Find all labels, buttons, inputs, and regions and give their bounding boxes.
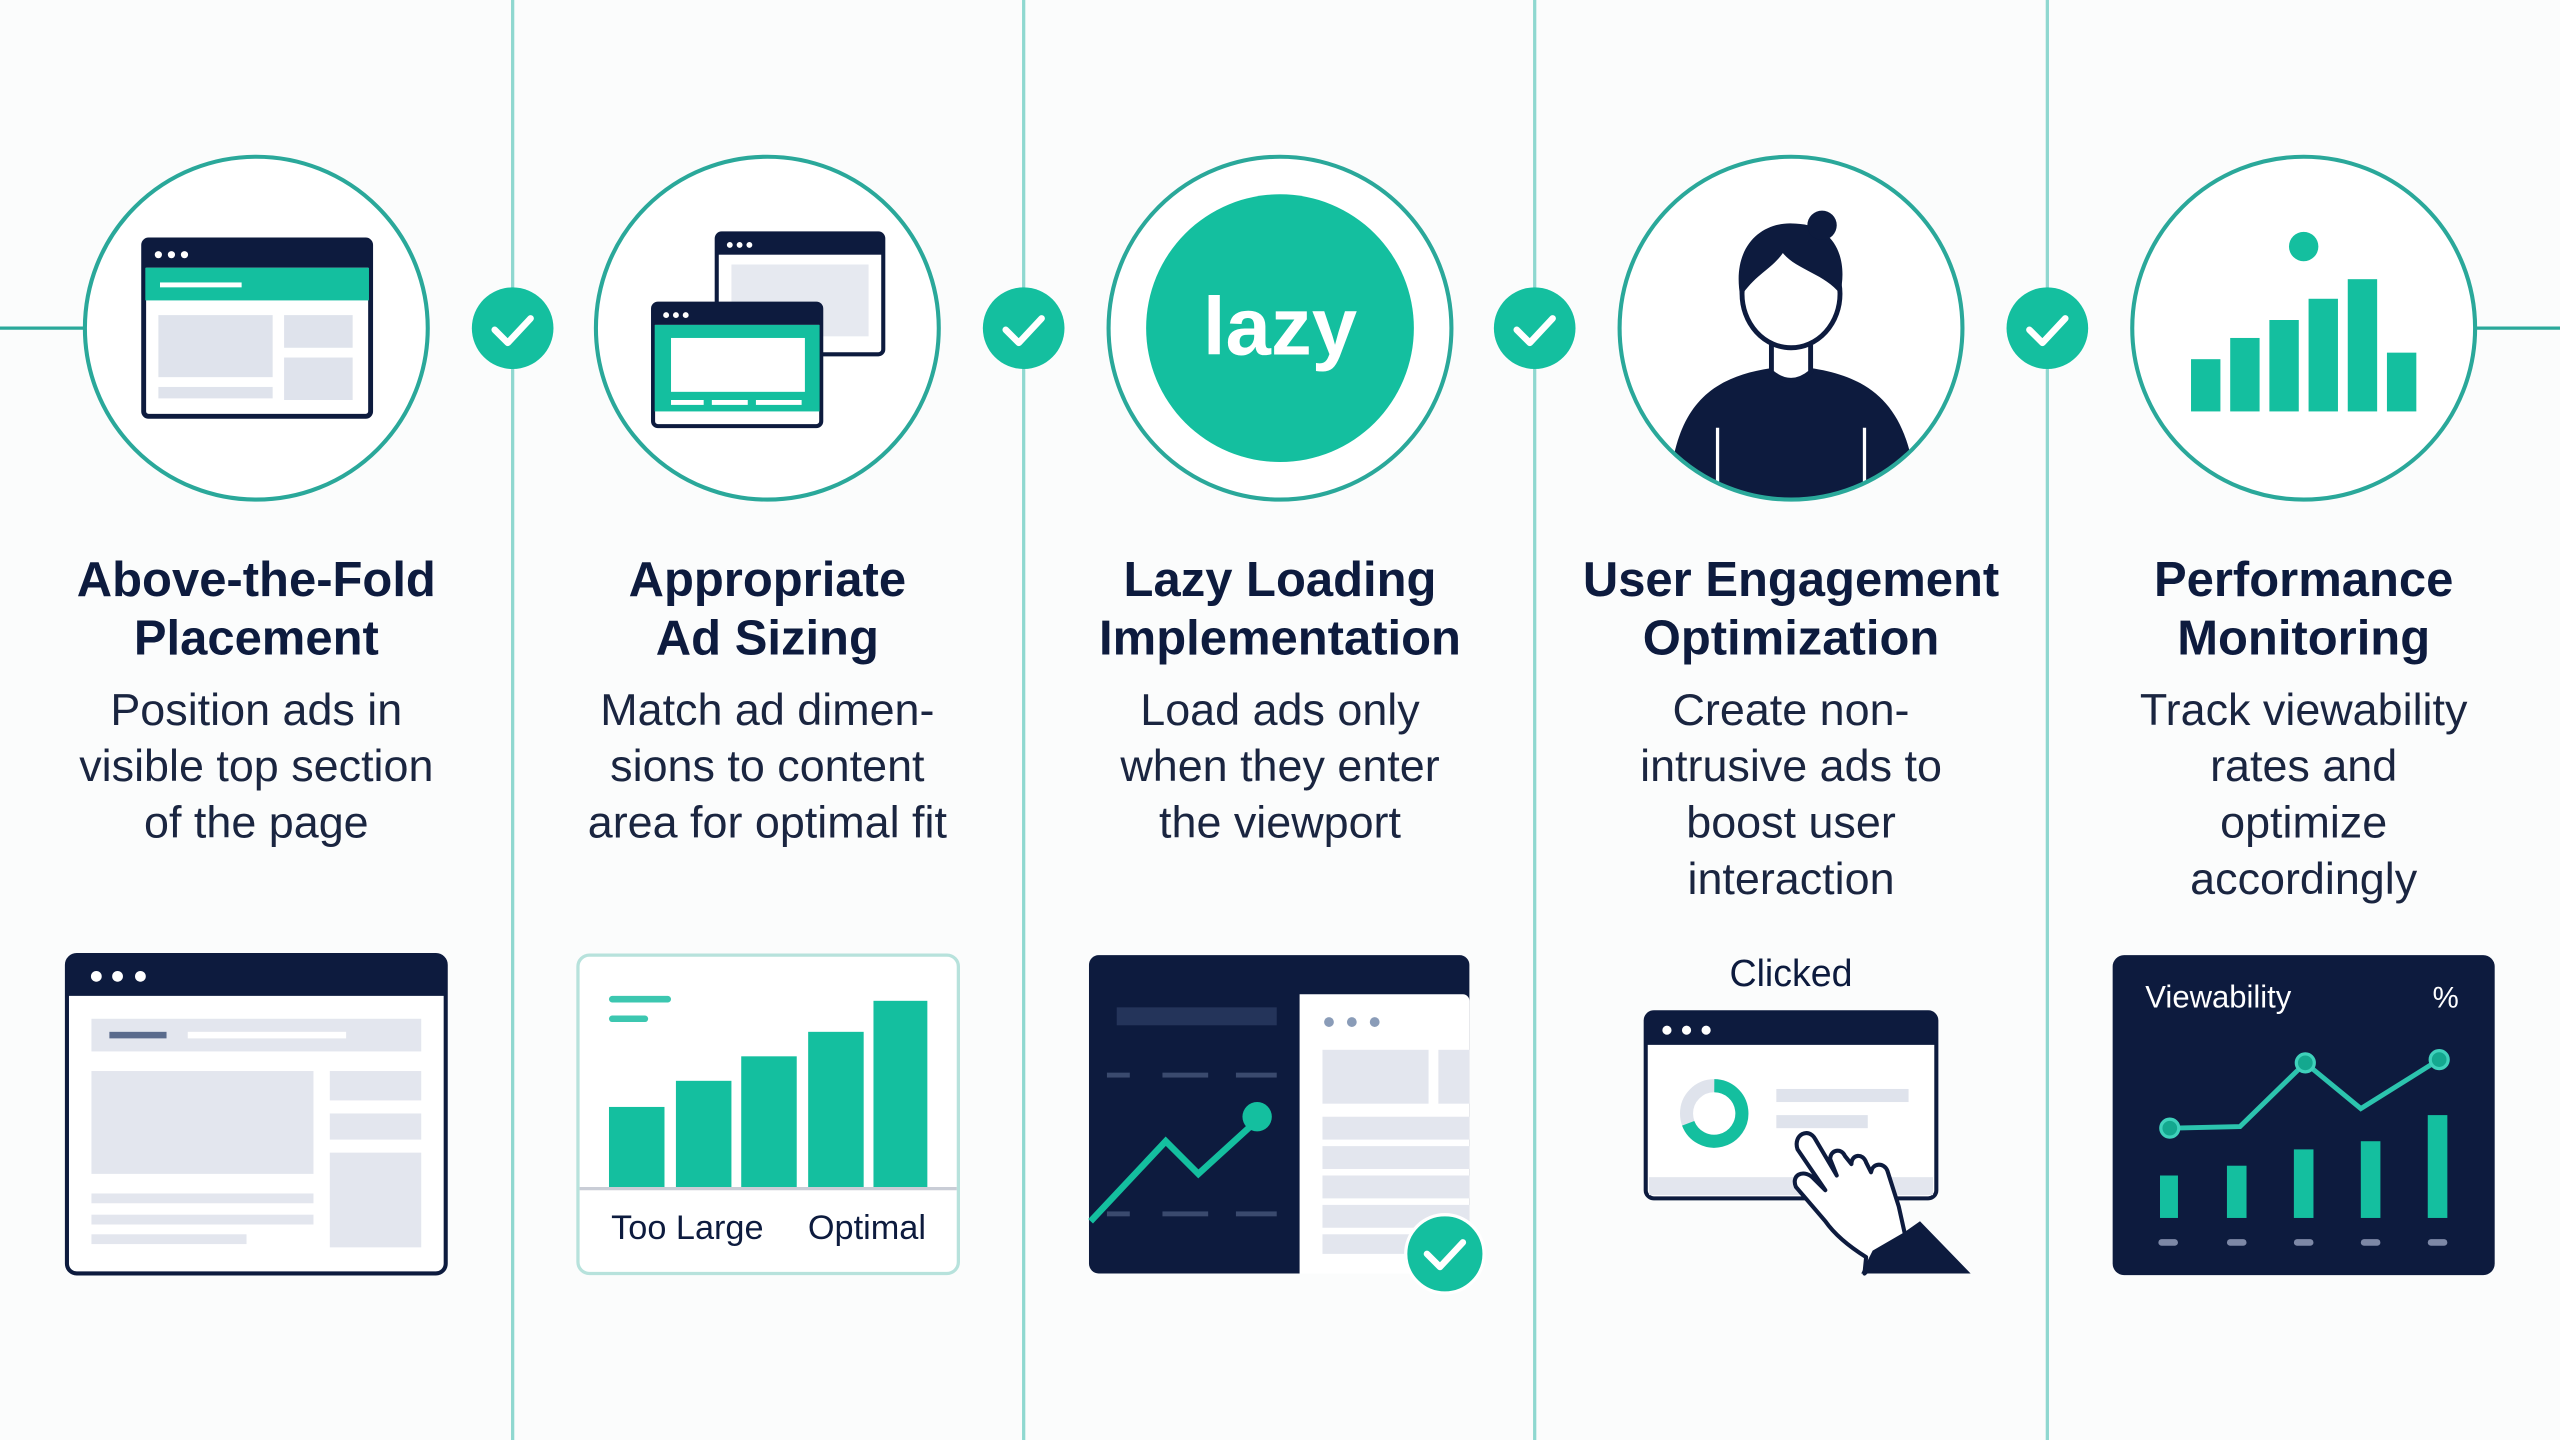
desc 3: when they enter [1119,740,1440,791]
connector checks [472,287,2088,369]
icon circle 3: lazy: lazy [1203,281,1357,372]
icon circle 3: lazy [1109,157,1451,500]
desc 3: Load ads only [1140,684,1420,735]
title 2: Ad Sizing [656,612,879,666]
desc 5: optimize [2220,797,2387,848]
icon circle 1: browser [85,157,428,500]
title 3: Lazy Loading [1124,553,1436,607]
desc 1: Position ads in [110,684,402,735]
title 3: Implementation [1099,612,1461,666]
card 4: clicked ad [1646,952,1971,1273]
desc 2: sions to content [610,740,925,791]
icon circle 2: two browsers [596,157,939,500]
card 5: viewability chart [2113,955,2495,1275]
title 1: Above-the-Fold [77,553,436,607]
desc 4: boost user [1686,797,1896,848]
title 1: Placement [134,612,379,666]
icon circle 4: person [1620,157,1962,500]
card 5: viewability chart: Viewability [2145,979,2292,1014]
desc 5: accordingly [2190,853,2418,904]
desc 5: rates and [2210,740,2397,791]
title 4: User Engagement [1583,553,1999,607]
card 5: viewability chart: % [2433,981,2459,1014]
desc 1: visible top section [79,740,433,791]
desc 1: of the page [144,797,369,848]
check badge [1406,1215,1484,1293]
icon circle 5: bars [2132,157,2475,500]
card 2: sizing bar chart [578,955,958,1273]
desc 5: Track viewability [2140,684,2468,735]
card 4: clicked ad: Clicked [1729,952,1853,994]
desc 4: intrusive ads to [1640,740,1942,791]
card 2: sizing bar chart: Too Large [611,1209,764,1247]
desc 4: Create non- [1673,684,1910,735]
title 5: Monitoring [2177,612,2430,666]
card 2: sizing bar chart: Optimal [808,1209,926,1247]
title 4: Optimization [1643,612,1939,666]
desc 2: Match ad dimen- [600,684,934,735]
title 2: Appropriate [629,553,906,607]
desc 4: interaction [1687,853,1895,904]
title 5: Performance [2154,553,2453,607]
hand [1795,1133,1905,1273]
desc 2: area for optimal fit [588,797,947,848]
card 3: lazy loading dashboard [1089,955,1484,1293]
desc 3: the viewport [1159,797,1402,848]
card 1: page layout [67,955,446,1273]
